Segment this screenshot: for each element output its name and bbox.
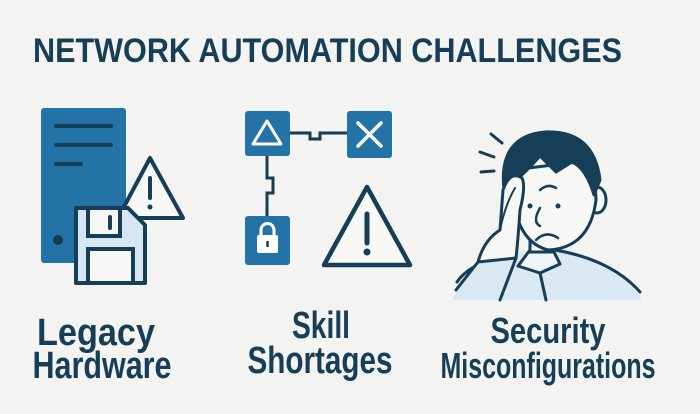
big warning bbox=[324, 187, 410, 265]
label: security misconfigurations bbox=[440, 310, 656, 386]
icon: legacy hardware bbox=[41, 108, 183, 283]
icon: skill shortages network bbox=[245, 111, 410, 265]
floppy disk bbox=[76, 208, 145, 283]
icon: stressed person bbox=[452, 132, 642, 300]
triangle box bbox=[245, 111, 290, 156]
connectors bbox=[290, 133, 347, 139]
X box bbox=[347, 111, 392, 158]
label: skill shortages: Skill bbox=[292, 305, 350, 347]
label: legacy hardware: Hardware bbox=[32, 345, 172, 387]
label: legacy hardware: Legacy bbox=[37, 312, 155, 354]
body / shoulders bbox=[452, 248, 642, 300]
eyebrow / eyes / nose / mouth bbox=[540, 186, 556, 190]
neck bbox=[530, 236, 552, 252]
collar bbox=[518, 248, 560, 273]
hand & arm bbox=[478, 176, 524, 275]
label: legacy hardware bbox=[32, 312, 172, 387]
hair bbox=[503, 132, 600, 195]
face bbox=[512, 160, 596, 250]
label: skill shortages bbox=[248, 305, 392, 382]
label: skill shortages: Shortages bbox=[248, 340, 392, 382]
small warning triangle bbox=[118, 158, 183, 218]
stress lines bbox=[491, 134, 502, 143]
lock box bbox=[245, 216, 290, 265]
server tower bbox=[41, 108, 126, 263]
label: security misconfigurations: Security bbox=[490, 310, 606, 351]
title: NETWORK AUTOMATION CHALLENGES bbox=[33, 32, 622, 70]
ear bbox=[588, 187, 606, 213]
